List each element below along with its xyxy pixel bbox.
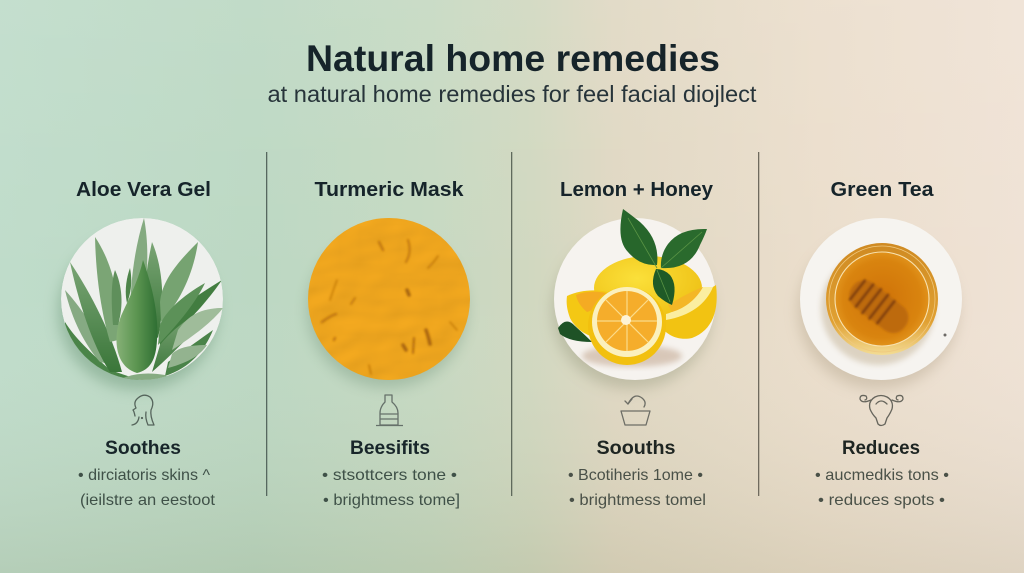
divider 2 (511, 152, 512, 496)
panel: lemon and honey (552, 179, 717, 389)
panel: aloe vera (58, 179, 223, 390)
benefit: benefits (322, 437, 460, 509)
image: turmeric paste (308, 218, 470, 380)
shadow: aloe circle (58, 234, 218, 390)
benefit: sooths (568, 437, 706, 509)
shadow: lemon circle (552, 233, 712, 389)
bullet line: beesifits 1: • stsottcers tone • (322, 467, 457, 484)
benefit heading: soothes: Soothes (105, 437, 181, 459)
benefit heading: reduces: Reduces (842, 437, 920, 459)
heading: lemon + honey: Lemon + Honey (560, 179, 714, 201)
bullet line: beesifits 2: • brightmess tome] (323, 492, 460, 509)
icon: face profile (132, 395, 154, 425)
shadow: tea plate (798, 233, 958, 389)
heading: turmeric mask: Turmeric Mask (314, 179, 464, 201)
bullet line: soothes 1: • dirciatoris skins ^ (78, 467, 210, 484)
bullet line: soouths 1: • Bcotiheris 1ome • (568, 467, 703, 484)
image: lemons with leaves (554, 209, 717, 380)
benefit: reduces (815, 437, 949, 509)
panel: turmeric mask (307, 179, 470, 388)
divider 1 (266, 152, 267, 496)
image: honey glass on plate (800, 218, 962, 380)
benefit: soothes (78, 437, 216, 509)
benefit heading: soouths: Soouths (596, 437, 676, 459)
benefit heading: beesifits: Beesifits (350, 437, 430, 459)
title: Natural home remedies (306, 38, 720, 79)
image: aloe plant (61, 218, 223, 385)
bullet line: reduces 1: • aucmedkis tons • (815, 467, 949, 484)
bullet line: soothes 2: (ieilstre an eestoot (80, 492, 216, 509)
heading: green tea: Green Tea (830, 179, 934, 201)
divider 3 (758, 152, 759, 496)
bullet line: reduces 2: • reduces spots • (818, 492, 945, 509)
bullet line: soouths 2: • brightmess tomel (569, 492, 706, 509)
heading: aloe vera gel: Aloe Vera Gel (76, 179, 211, 201)
subtitle: at natural home remedies for feel facial diojlect (268, 81, 757, 107)
shadow: turmeric circle (307, 232, 467, 388)
icon: light bulb (860, 395, 903, 426)
panel: green tea (798, 179, 962, 389)
icon: basket (621, 396, 650, 425)
icon: bottle (376, 395, 403, 426)
